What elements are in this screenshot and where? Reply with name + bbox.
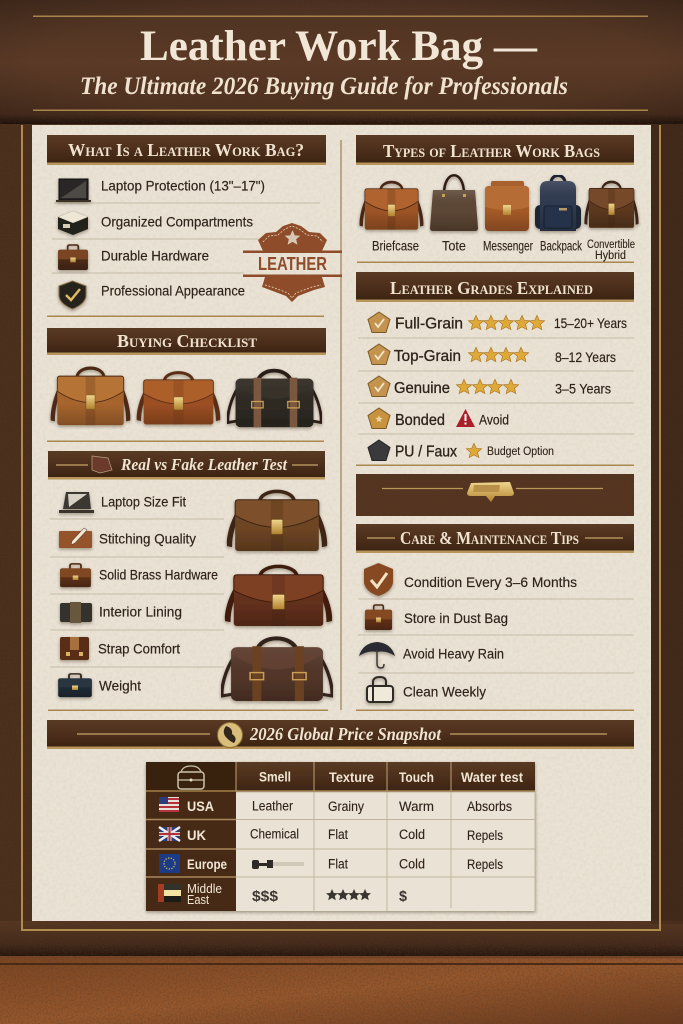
- icon: clean lock bag: [367, 677, 393, 702]
- heading: leather grades: Leather Grades Explained: [390, 278, 593, 298]
- heading: 2026 global price snapshot: [47, 720, 634, 749]
- icon: compartments box: [58, 211, 88, 235]
- table header row: Smell: [259, 770, 291, 784]
- text: laptop protection: Laptop Protection (13"–17"): [101, 178, 265, 194]
- leather badge: [243, 223, 342, 302]
- text: solid brass hardware: Solid Brass Hardware: [99, 566, 218, 582]
- grade: pu / faux: [368, 440, 554, 460]
- heading: buying checklist: [47, 328, 326, 355]
- text: avoid rain: Avoid Heavy Rain: [403, 646, 504, 662]
- row: europe: Cold: [399, 856, 425, 872]
- row: usa: [252, 798, 512, 814]
- heading: care: Care & Maintenance Tips: [400, 528, 579, 548]
- region column: UK: [187, 828, 206, 843]
- decorative buckle banner: [356, 474, 634, 516]
- grade: bonded: Avoid: [479, 412, 509, 428]
- row: uk: Flat: [328, 827, 348, 842]
- panel: types of leather work bags: [356, 135, 639, 262]
- text: durable hardware: Durable Hardware: [101, 248, 209, 264]
- panel: what is a leather work bag: [47, 135, 342, 309]
- row: uk: Cold: [399, 827, 425, 842]
- region column: Europe: [187, 857, 227, 872]
- heading: 2026 global price snapshot: 2026 Global Price Snapshot: [249, 724, 442, 744]
- table header row: Touch: [399, 770, 434, 785]
- grade: top-grain: [368, 344, 616, 365]
- region column: USA: [187, 799, 214, 814]
- bag: backpack: [535, 176, 581, 231]
- icon: briefcase: [58, 245, 88, 270]
- icon: stitching: [59, 528, 92, 548]
- bag: distressed brown: [227, 491, 327, 551]
- heading: what is a leather work bag: [47, 135, 326, 165]
- row: uk: [250, 826, 503, 843]
- text: organized compartments: Organized Compartments: [101, 214, 253, 230]
- price table: [146, 762, 535, 911]
- heading: leather grades: [356, 272, 634, 302]
- region column: East: [187, 893, 209, 907]
- icon: brass hardware pouch: [60, 564, 91, 587]
- icon: laptop: [59, 492, 94, 513]
- icon: strap comfort: [60, 637, 89, 660]
- heading: types: [356, 135, 634, 165]
- grade: full-grain: Full-Grain: [395, 316, 463, 332]
- grade: bonded: [368, 408, 509, 429]
- bag: messenger: [485, 181, 529, 231]
- row: europe: Repels: [467, 857, 503, 872]
- bag: convertible hybrid: [584, 182, 639, 228]
- label: briefcase: Briefcase: [372, 238, 419, 254]
- heading: care: [356, 524, 634, 553]
- table header row: [146, 762, 535, 792]
- grade: pu / faux: Budget Option: [487, 446, 554, 458]
- header banner: [0, 0, 683, 124]
- bag: dark duffle: [222, 638, 332, 701]
- heading: types: Types of Leather Work Bags: [383, 141, 600, 161]
- heading: buying checklist: Buying Checklist: [117, 331, 257, 351]
- heading: real vs fake: [48, 451, 325, 480]
- row: europe: [252, 856, 503, 872]
- label: tote: Tote: [442, 238, 466, 254]
- grade: genuine: [368, 376, 611, 397]
- label: messenger: Messenger: [483, 238, 533, 254]
- row: usa: Absorbs: [467, 799, 512, 814]
- grade: full-grain: 15–20+ Years: [554, 315, 627, 331]
- heading: what is a leather work bag: What Is a Leather Work Bag?: [68, 140, 304, 160]
- table header row: Texture: [329, 770, 374, 785]
- text: clean weekly: Clean Weekly: [403, 684, 486, 700]
- leather badge: LEATHER: [258, 254, 327, 274]
- panel: care and maintenance tips: [356, 524, 634, 702]
- region column: [146, 792, 236, 911]
- icon: interior lining: [60, 602, 92, 623]
- row: europe: Flat: [328, 856, 348, 872]
- panel: real vs fake leather test: [48, 451, 332, 701]
- grade: top-grain: 8–12 Years: [555, 349, 616, 365]
- bag: briefcase: [360, 182, 423, 230]
- bag: chestnut briefcase: [137, 373, 220, 424]
- row: uk: Repels: [467, 828, 503, 843]
- table header row: Water test: [461, 770, 523, 785]
- label: backpack: Backpack: [540, 238, 582, 254]
- title: Leather Work Bag —: [140, 23, 538, 70]
- text: store: Store in Dust Bag: [404, 610, 508, 626]
- row: middle east: [252, 888, 408, 905]
- row: uk: Chemical: [250, 826, 299, 842]
- text: interior lining: Interior Lining: [99, 604, 182, 620]
- icon: shield: [59, 281, 86, 309]
- icon: shield check: [364, 563, 393, 596]
- label: convertible hybrid: Convertible: [587, 239, 635, 251]
- label: convertible hybrid: Hybrid: [595, 250, 626, 262]
- panel: buying checklist: [47, 328, 326, 427]
- panel: leather grades explained: [356, 272, 634, 460]
- text: stitching quality: Stitching Quality: [99, 530, 196, 546]
- region column: Middle: [187, 882, 222, 896]
- grade: genuine: Genuine: [394, 380, 450, 397]
- icon: laptop: [56, 179, 91, 202]
- gold frame: [22, 125, 660, 930]
- text: professional appearance: Professional Appearance: [101, 282, 245, 298]
- text: weight: Weight: [99, 678, 141, 694]
- heading: real vs fake: Real vs Fake Leather Test: [120, 455, 288, 474]
- row: middle east: $$$: [252, 888, 279, 905]
- grade: pu / faux: PU / Faux: [395, 444, 457, 460]
- cream paper panel: [32, 125, 651, 921]
- grade: top-grain: Top-Grain: [394, 348, 461, 365]
- bag: tote: [430, 175, 478, 231]
- icon: dust bag case: [365, 605, 392, 630]
- grade: genuine: 3–5 Years: [555, 380, 611, 396]
- text: condition: Condition Every 3–6 Months: [404, 574, 577, 590]
- row: middle east: $: [399, 888, 408, 905]
- row: usa: Leather: [252, 798, 293, 814]
- bag: glossy chestnut: [225, 566, 332, 626]
- icon: weight bag: [58, 674, 92, 697]
- icon: umbrella: [359, 642, 395, 668]
- grade: full-grain: [368, 312, 627, 332]
- text: strap comfort: Strap Comfort: [98, 640, 180, 656]
- bag: black duffle: [228, 371, 321, 427]
- grade: bonded: Bonded: [395, 412, 445, 429]
- row: usa: Warm: [399, 799, 434, 814]
- text: laptop size fit: Laptop Size Fit: [101, 494, 186, 510]
- bag: tan briefcase: [51, 368, 130, 425]
- row: usa: Grainy: [328, 799, 364, 814]
- subtitle: The Ultimate 2026 Buying Guide for Professionals: [80, 73, 568, 100]
